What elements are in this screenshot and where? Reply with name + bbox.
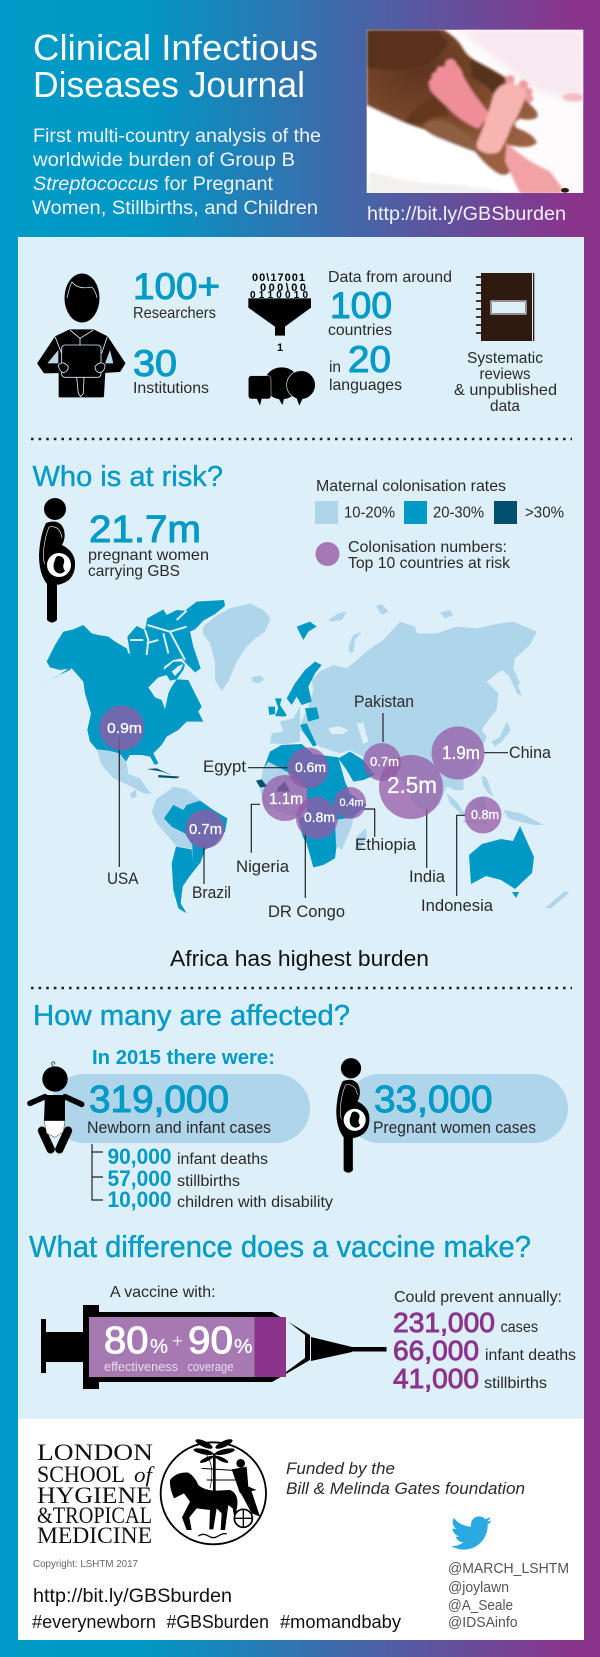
- photo: newborn feet in a hand: [367, 30, 584, 194]
- stat: institutions: [133, 343, 209, 397]
- icon: data funnel: 0 0 0 \ 0 0: [260, 282, 306, 294]
- stat: researchers: 100+: [133, 266, 220, 307]
- text: systematic reviews: [454, 350, 557, 415]
- subtitle: worldwide burden of Group B: [32, 150, 295, 171]
- vaccine impact stats: infant deaths: [485, 1347, 576, 1364]
- vaccine impact stats: [393, 1289, 576, 1394]
- icon: syringe: [41, 1305, 386, 1389]
- legend: maternal colonisation rates: 10-20%: [344, 504, 395, 522]
- heading: how many are affected: How many are affected?: [33, 1000, 350, 1032]
- icon: pregnant woman: [39, 498, 75, 622]
- text: systematic reviews: & unpublished: [454, 382, 557, 399]
- country labels: [107, 692, 552, 921]
- subtitle: Women, Stillbirths, and Children: [32, 198, 318, 219]
- hashtags: #GBSburden: [166, 1612, 269, 1632]
- stat: languages: languages: [329, 377, 402, 394]
- country labels: Indonesia: [421, 896, 494, 915]
- vaccine impact stats: 41,000: [393, 1363, 479, 1394]
- world map: [30, 600, 569, 913]
- icon: syringe: 80: [104, 1320, 148, 1362]
- legend: maternal colonisation rates: [315, 478, 564, 524]
- bubble: China 1.9m: 1.9m: [442, 743, 480, 763]
- icon: syringe: 90: [188, 1320, 233, 1362]
- hashtags: [32, 1612, 401, 1632]
- map: australia: [469, 826, 534, 898]
- country labels: Brazil: [192, 883, 231, 902]
- pill: pregnant women cases: [345, 1074, 568, 1143]
- breakdown: outcomes: [92, 1144, 333, 1212]
- bubble: USA 0.9m: 0.9m: [107, 720, 142, 737]
- bubble: Indonesia 0.8m: 0.8m: [471, 807, 499, 822]
- bubble: Egypt 0.6m: [288, 748, 328, 788]
- pill: pregnant women cases: 33,000: [374, 1079, 492, 1121]
- icon: baby: [30, 1062, 82, 1149]
- heading: what difference does a vaccine make: What difference does a vaccine make?: [29, 1229, 531, 1264]
- icon: data funnel: 0 0 \ 1 7 0 0 1: [252, 272, 305, 284]
- twitter handles: @MARCH_LSHTM: [448, 1560, 569, 1577]
- icon: syringe: coverage: [188, 1360, 234, 1374]
- vaccine impact stats: 66,000: [393, 1335, 479, 1366]
- subheading: in 2015: In 2015 there were:: [92, 1047, 275, 1069]
- breakdown: outcomes: 90,000: [108, 1144, 172, 1169]
- leader lines for map: [119, 713, 508, 898]
- bubble: DR Congo 0.8m: [296, 797, 338, 839]
- bubble: Indonesia 0.8m: [464, 796, 502, 834]
- pill: newborn and infant cases: 319,000: [89, 1079, 229, 1121]
- bubble: Brazil 0.7m: 0.7m: [189, 821, 222, 838]
- subtitle: Streptococcus for Pregnant: [33, 174, 274, 195]
- stat: 21.7m pregnant women: pregnant women: [88, 547, 209, 564]
- bubble: India 2.5m: [379, 755, 443, 819]
- breakdown: outcomes: stillbirths: [177, 1173, 240, 1190]
- vaccine impact stats: 231,000: [393, 1307, 495, 1338]
- legend: maternal colonisation rates: >30%: [525, 504, 564, 522]
- country labels: USA: [107, 869, 139, 888]
- logo text: London School of Hygiene and Tropical Medicine: [37, 1440, 155, 1548]
- subtitle: First multi-country analysis of the: [33, 126, 321, 147]
- country labels: Pakistan: [354, 692, 414, 711]
- map caption: Africa has highest burden: [170, 946, 429, 971]
- logo text: London School of Hygiene and Tropical Medicine: LONDON: [37, 1440, 153, 1465]
- funder credit: Bill & Melinda Gates foundation: [286, 1479, 525, 1498]
- stat: countries: 100: [330, 285, 392, 326]
- icon: data funnel: 1: [277, 342, 283, 354]
- hashtags: #momandbaby: [280, 1612, 401, 1632]
- vaccine impact stats: cases: [500, 1319, 538, 1336]
- bubble: Nigeria 1.1m: [262, 775, 308, 821]
- breakdown: outcomes: 57,000: [108, 1166, 172, 1191]
- country labels: India: [409, 867, 446, 886]
- logo text: London School of Hygiene and Tropical Medicine: of: [134, 1462, 155, 1487]
- label: Pakistan 0.7m: 0.7m: [370, 754, 399, 769]
- bubble: USA 0.9m: [99, 706, 144, 750]
- vaccine impact stats: Could prevent annually:: [394, 1289, 562, 1306]
- icon: data funnel: 0 1 1 0 0 1 0: [250, 290, 308, 301]
- stat: languages: 20: [348, 339, 391, 380]
- stat: 21.7m pregnant women: 21.7m: [89, 509, 201, 551]
- stat: countries: Data from around: [328, 269, 452, 286]
- title: [33, 27, 318, 105]
- bubble: Ethiopia 0.4m: 0.4m: [340, 797, 364, 809]
- country labels: Nigeria: [236, 857, 290, 876]
- map: new zealand: [545, 891, 569, 908]
- text: systematic reviews: data: [490, 398, 520, 415]
- breakdown: outcomes: children with disability: [177, 1194, 333, 1211]
- country labels: China: [509, 743, 552, 762]
- hashtags: #everynewborn: [32, 1612, 156, 1632]
- funder credit: Funded by the: [286, 1459, 395, 1478]
- heading: who is at risk: Who is at risk?: [32, 461, 223, 493]
- main light panel: [18, 237, 584, 1419]
- title: Clinical Infectious: [33, 27, 318, 68]
- legend: colonisation numbers: [316, 539, 511, 572]
- white footer panel: [18, 1419, 584, 1640]
- logo text: London School of Hygiene and Tropical Medicine: &TROPICAL: [37, 1503, 152, 1528]
- breakdown: outcomes: 10,000: [108, 1187, 172, 1212]
- icon: syringe: effectiveness: [104, 1360, 178, 1374]
- stat: 21.7m pregnant women: carrying GBS: [88, 563, 180, 580]
- subtitle: [32, 126, 321, 219]
- title: Diseases Journal: [33, 64, 305, 105]
- bubble: Nigeria 1.1m: 1.1m: [269, 791, 303, 808]
- icon: data funnel: [248, 272, 311, 354]
- icon: syringe: %: [150, 1336, 168, 1358]
- icon: pregnant woman cases: [336, 1058, 369, 1173]
- icon: speech bubbles: [248, 367, 315, 406]
- stat: researchers: Researchers: [133, 305, 216, 322]
- bubble: Pakistan 0.7m: [363, 743, 401, 781]
- stat: languages: [329, 339, 402, 394]
- legend: maternal colonisation rates: Maternal colonisation rates: [316, 478, 506, 495]
- funder credit: [286, 1459, 525, 1498]
- logo text: London School of Hygiene and Tropical Medicine: HYGIENE: [37, 1483, 152, 1508]
- bubble: Brazil 0.7m: [186, 810, 224, 848]
- map: americas and greenland: [30, 600, 300, 798]
- text: systematic reviews: Systematic: [467, 350, 543, 367]
- twitter handles: @IDSAinfo: [448, 1614, 518, 1631]
- stat: 21.7m pregnant women: [88, 509, 209, 580]
- text: systematic reviews: reviews: [480, 366, 530, 383]
- vaccine impact stats: stillbirths: [484, 1375, 547, 1392]
- photo url: http://bit.ly/GBSburden: [367, 204, 566, 225]
- legend: maternal colonisation rates: 20-30%: [433, 504, 484, 522]
- bubble: Egypt 0.6m: 0.6m: [295, 759, 326, 775]
- icon: notebook: [476, 273, 534, 341]
- pill: pregnant women cases: Pregnant women cases: [373, 1118, 536, 1137]
- stat: countries: [328, 269, 452, 339]
- pill: newborn and infant cases: Newborn and infant cases: [87, 1118, 271, 1137]
- pill: newborn and infant cases: [50, 1074, 310, 1143]
- logo: crest with horse and chariot: [161, 1437, 266, 1544]
- map: eurasia and oceania: [287, 604, 543, 825]
- breakdown: outcomes: infant deaths: [177, 1151, 268, 1168]
- icon: researcher with tablet: [39, 274, 124, 397]
- bubble: DR Congo 0.8m: 0.8m: [304, 809, 335, 825]
- country labels: DR Congo: [268, 902, 345, 921]
- logo text: London School of Hygiene and Tropical Medicine: SCHOOL: [37, 1462, 125, 1487]
- twitter handles: @joylawn: [448, 1579, 509, 1596]
- map: south america and africa: [152, 744, 367, 913]
- copyright: Copyright: LSHTM 2017: [33, 1559, 138, 1570]
- legend: colonisation numbers: Top 10 countries at risk: [348, 555, 511, 572]
- legend: colonisation numbers: Colonisation numbers:: [348, 539, 507, 556]
- bubble: China 1.9m: [432, 726, 484, 780]
- country labels: Ethiopia: [355, 835, 417, 854]
- stat: institutions: Institutions: [133, 380, 209, 397]
- country labels: Egypt: [203, 757, 246, 776]
- bubble: India 2.5m: 2.5m: [387, 772, 437, 798]
- icon: syringe: %: [234, 1336, 253, 1358]
- stat: countries: countries: [328, 322, 392, 339]
- icon: twitter bird: [451, 1516, 492, 1550]
- label: a vaccine with: A vaccine with:: [110, 1284, 216, 1301]
- stat: languages: in: [329, 359, 341, 376]
- bubble: Ethiopia 0.4m: [334, 787, 366, 819]
- stat: institutions: 30: [133, 343, 177, 384]
- twitter handles: [448, 1560, 569, 1631]
- logo text: London School of Hygiene and Tropical Medicine: MEDICINE: [37, 1523, 152, 1548]
- icon: syringe: +: [172, 1331, 183, 1351]
- twitter handles: @A_Seale: [448, 1597, 513, 1614]
- footer url: http://bit.ly/GBSburden: [33, 1586, 232, 1607]
